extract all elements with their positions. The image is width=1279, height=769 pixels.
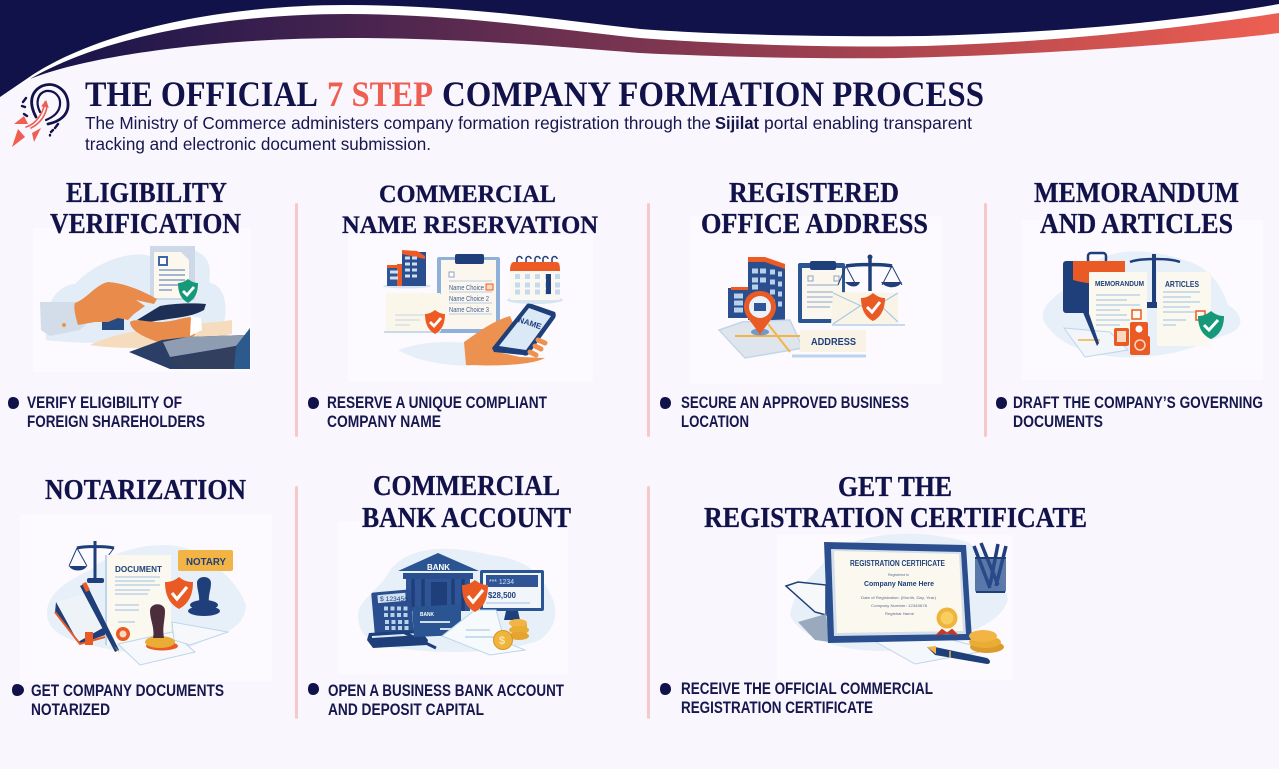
icon: green shield bbox=[1198, 311, 1224, 339]
heading: commercial name reservation: NAME RESERVATION bbox=[342, 212, 598, 239]
heading: commercial bank account: BANK ACCOUNT bbox=[362, 502, 571, 534]
illustration: name choices and phone: Name Choice 3 bbox=[449, 305, 489, 314]
label: articles: ARTICLES bbox=[1165, 279, 1199, 289]
certificate text: Company Number: 12345678 bbox=[871, 603, 928, 608]
certificate text: REGISTRATION CERTIFICATE bbox=[850, 559, 946, 568]
header wave band bbox=[0, 0, 1279, 97]
monitor: $28,500 bbox=[488, 590, 516, 600]
illustration: name choices and phone: NAME bbox=[517, 315, 543, 332]
icon: pen cup bbox=[974, 543, 1006, 593]
bullet: open account bbox=[308, 682, 564, 719]
heading: commercial bank account: COMMERCIAL bbox=[373, 470, 560, 502]
monitor bbox=[480, 570, 544, 620]
icon: coins bbox=[494, 619, 529, 650]
label: document: DOCUMENT bbox=[115, 564, 163, 574]
panel: step 5 notarization bbox=[12, 474, 272, 719]
bullet: verify eligibility bbox=[8, 394, 205, 431]
title bbox=[85, 74, 984, 114]
title: THE OFFICIAL bbox=[85, 74, 318, 114]
heading: eligibility verification: VERIFICATION bbox=[50, 208, 241, 240]
illustration: hands with phone and laptop bbox=[40, 246, 250, 369]
panel: step 1 eligibility verification bbox=[8, 177, 251, 431]
heading: memorandum and articles: MEMORANDUM bbox=[1034, 177, 1239, 209]
panel: step 7 registration certificate bbox=[660, 471, 1087, 717]
illustration: stamps, document, notary plate bbox=[47, 541, 246, 665]
bullet: receive certificate bbox=[660, 680, 933, 717]
bullet: reserve name: COMPANY NAME bbox=[327, 413, 441, 431]
bullet: get notarized: NOTARIZED bbox=[31, 701, 110, 719]
bullet: receive certificate: RECEIVE THE OFFICIAL COMMERCIAL bbox=[681, 680, 933, 698]
certificate text: Date of Registration: (Month, Day, Year) bbox=[861, 595, 937, 600]
icon: navy stamp bbox=[188, 577, 220, 616]
icon: orange shield bbox=[462, 580, 488, 612]
bullet: reserve name bbox=[308, 394, 547, 431]
bullet: open account: OPEN A BUSINESS BANK ACCOUNT bbox=[328, 682, 564, 700]
illustration: bank, card, monitor, coins: BANK bbox=[420, 612, 434, 618]
label: memorandum: MEMORANDUM bbox=[1095, 279, 1144, 288]
heading: memorandum and articles: AND ARTICLES bbox=[1040, 208, 1233, 240]
illustration: name choices and phone bbox=[383, 250, 563, 366]
panel: step 4 memorandum and articles bbox=[996, 177, 1263, 431]
heading: registered office address: OFFICE ADDRESS bbox=[701, 208, 928, 240]
illustration: building, map and address bbox=[719, 254, 905, 358]
bullet: receive certificate: REGISTRATION CERTIFICATE bbox=[681, 699, 873, 717]
bullet: secure location bbox=[660, 394, 909, 431]
intro text bbox=[85, 113, 972, 154]
icon: scales bbox=[69, 541, 114, 583]
title: 7 STEP bbox=[327, 74, 433, 114]
bank building bbox=[398, 553, 479, 611]
bank building: BANK bbox=[427, 563, 450, 572]
icon: brown stamp bbox=[145, 604, 178, 650]
icon: pen bbox=[927, 646, 990, 664]
illustration: name choices and phone: Name Choice bbox=[449, 283, 484, 292]
bullet: get notarized bbox=[12, 682, 224, 719]
icon: orange shield bbox=[425, 310, 445, 334]
panel: step 6 commercial bank account bbox=[308, 470, 571, 719]
icon: orange shield bbox=[165, 577, 193, 609]
heading: eligibility verification bbox=[50, 177, 241, 240]
notary plate bbox=[178, 550, 233, 571]
illustration: framed certificate bbox=[786, 534, 1008, 664]
icon: orange shield bbox=[861, 293, 885, 321]
icon: coins bbox=[969, 630, 1004, 653]
icon: rocket logo bbox=[12, 85, 68, 147]
intro text: portal enabling transparent bbox=[764, 113, 972, 133]
monitor: *** 1234 bbox=[489, 579, 514, 586]
icon: balance scales bbox=[838, 254, 902, 291]
bullet: draft documents: DOCUMENTS bbox=[1013, 413, 1103, 431]
intro text: tracking and electronic document submission. bbox=[85, 134, 431, 154]
heading: commercial name reservation bbox=[342, 181, 598, 239]
notary plate: NOTARY bbox=[186, 557, 226, 568]
heading: memorandum and articles bbox=[1034, 177, 1239, 240]
heading: notarization: NOTARIZATION bbox=[45, 474, 246, 506]
bullet: open account: AND DEPOSIT CAPITAL bbox=[328, 701, 484, 719]
panel: step 2 commercial name reservation bbox=[308, 181, 598, 431]
heading: get the registration certificate: GET THE bbox=[838, 471, 952, 503]
heading: eligibility verification: ELIGIBILITY bbox=[66, 177, 227, 209]
icon: green shield bbox=[178, 279, 198, 303]
illustration: bank, card, monitor, coins: $ 123456 bbox=[380, 596, 408, 603]
intro text: The Ministry of Commerce administers company formation registration through the bbox=[85, 113, 711, 133]
bullet: verify eligibility: VERIFY ELIGIBILITY OF bbox=[27, 394, 182, 412]
heading: get the registration certificate: REGISTRATION CERTIFICATE bbox=[704, 502, 1087, 534]
bullet: reserve name: RESERVE A UNIQUE COMPLIANT bbox=[327, 394, 547, 412]
intro text: Sijilat bbox=[715, 113, 759, 133]
label: address: ADDRESS bbox=[811, 336, 856, 348]
title: COMPANY FORMATION PROCESS bbox=[442, 74, 984, 114]
certificate text: Registered to bbox=[888, 572, 910, 577]
certificate text: Company Name Here bbox=[864, 581, 934, 588]
certificate text bbox=[850, 559, 946, 616]
heading: registered office address: REGISTERED bbox=[729, 177, 899, 209]
heading: registered office address bbox=[701, 177, 928, 240]
bullet: verify eligibility: FOREIGN SHAREHOLDERS bbox=[27, 413, 205, 431]
icon: location pin bbox=[744, 291, 776, 335]
heading: commercial name reservation: COMMERCIAL bbox=[379, 181, 556, 208]
illustration: name choices and phone: Name Choice 2 bbox=[449, 294, 489, 303]
bullet: secure location: SECURE AN APPROVED BUSINESS bbox=[681, 394, 909, 412]
bullet: get notarized: GET COMPANY DOCUMENTS bbox=[31, 682, 224, 700]
heading: commercial bank account bbox=[362, 470, 571, 534]
certificate text: Registrar Name bbox=[885, 611, 915, 616]
illustration: documents, scales, briefcase bbox=[1043, 251, 1240, 358]
bullet: draft documents bbox=[996, 394, 1263, 431]
bullet: secure location: LOCATION bbox=[681, 413, 749, 431]
heading: get the registration certificate bbox=[704, 471, 1087, 534]
panel: step 3 registered office address bbox=[660, 177, 942, 431]
icon: coins: $ bbox=[499, 635, 505, 647]
illustration: bank, card, monitor, coins bbox=[358, 549, 555, 655]
